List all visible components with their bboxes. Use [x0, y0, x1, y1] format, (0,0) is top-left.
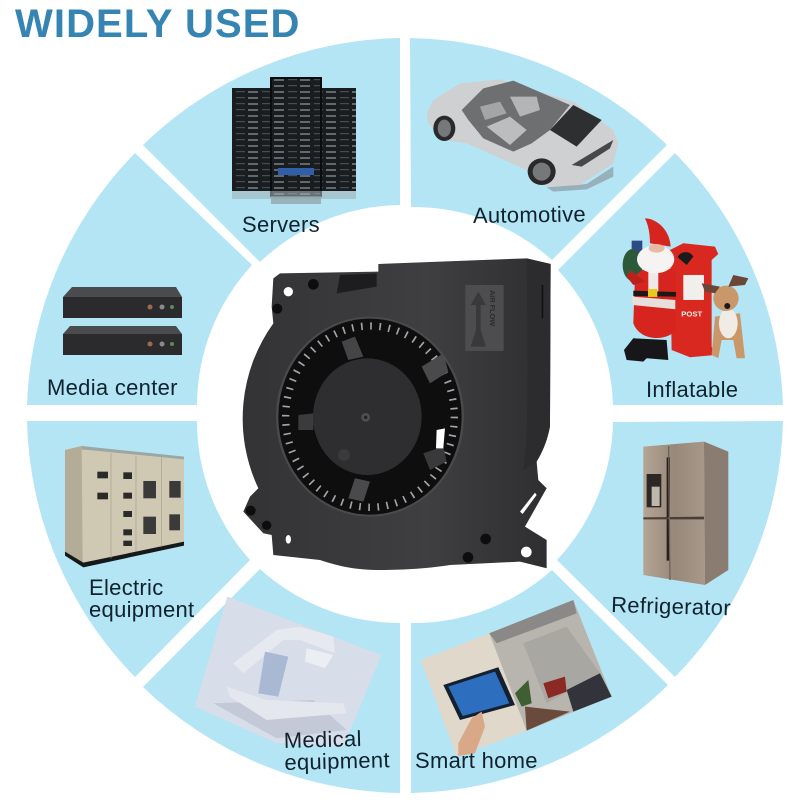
- label: refrigerator: Refrigerator: [611, 592, 731, 620]
- label: servers: Servers: [242, 212, 320, 237]
- label: medical equipment: [283, 725, 390, 775]
- icon: media boxes: [63, 287, 182, 355]
- picture: medical equipment: [195, 597, 382, 747]
- panel: servers: [143, 38, 400, 262]
- label: smart home: Smart home: [415, 748, 538, 773]
- icon: santa, postbox and reindeer: [623, 218, 748, 362]
- picture: smart home: [421, 600, 612, 757]
- label: electric equipment: [89, 575, 194, 622]
- icon: server racks: [232, 78, 356, 204]
- icon: electric cabinet: [65, 446, 184, 567]
- mounting holes: [246, 273, 543, 563]
- panel: electric equipment: [27, 421, 250, 677]
- title: WIDELY USED: [15, 2, 300, 46]
- impeller: [276, 317, 464, 517]
- label: electric equipment: Electric: [89, 575, 164, 600]
- fan housing: [243, 258, 551, 570]
- label: medical equipment: Medical: [283, 726, 362, 753]
- label: medical equipment: equipment: [284, 747, 390, 775]
- panel: automotive: [410, 38, 667, 260]
- icon: car: [427, 79, 618, 192]
- panel: smart home: [411, 570, 668, 793]
- panel: media center: [27, 153, 252, 405]
- label: media center: Media center: [47, 375, 178, 400]
- icon: blower fan: [243, 258, 551, 570]
- panel: inflatable: [558, 153, 783, 405]
- label: inflatable: Inflatable: [646, 377, 738, 402]
- icon: refrigerator: [643, 442, 728, 585]
- icon: santa, postbox and reindeer: POST: [681, 310, 702, 319]
- panel: medical equipment: [143, 569, 400, 793]
- label: automotive: Automotive: [473, 201, 586, 228]
- airflow plate: [465, 285, 504, 351]
- panel: refrigerator: [557, 421, 783, 677]
- airflow plate: AIR FLOW: [488, 290, 497, 326]
- label: electric equipment: equipment: [89, 597, 194, 622]
